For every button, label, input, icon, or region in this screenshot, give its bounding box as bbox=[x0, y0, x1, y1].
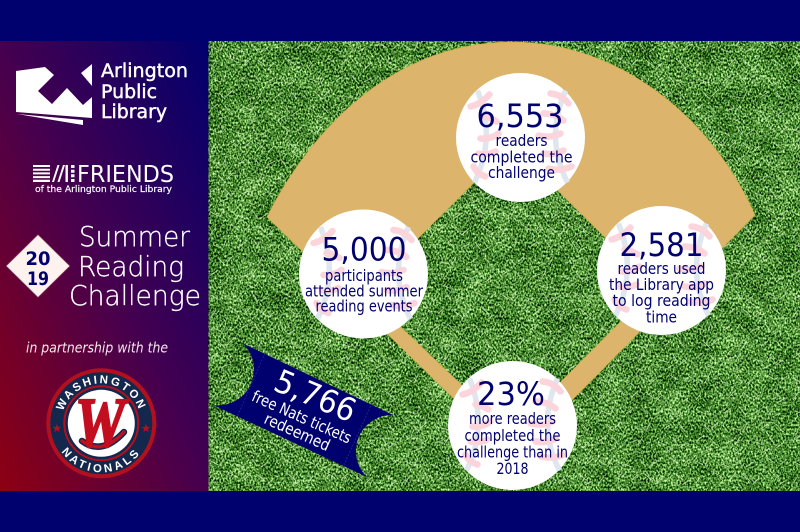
stat number: 2,581 bbox=[620, 226, 704, 264]
Friends of the Arlington Public Library logo bbox=[33, 162, 174, 195]
stat caption: 2018 bbox=[496, 459, 528, 478]
curly W swoosh fill bbox=[82, 432, 124, 447]
baseball circle bbox=[448, 361, 577, 490]
stat caption: completed the bbox=[464, 426, 560, 445]
baseball seams bbox=[462, 378, 564, 470]
stat caption: completed the bbox=[470, 148, 572, 166]
logo wordmark: Arlington bbox=[101, 61, 188, 82]
bottom navy band bbox=[0, 491, 800, 532]
Washington Nationals roundel bbox=[46, 368, 156, 478]
roundel rings bbox=[46, 368, 156, 478]
stat caption: more readers bbox=[469, 409, 556, 428]
grass field background bbox=[208, 41, 800, 491]
curly W letter: W bbox=[75, 385, 129, 462]
roundel bottom lettering: NATIONALS bbox=[62, 447, 138, 472]
friends icon: book stacks bbox=[33, 165, 74, 182]
stat caption: the Library app bbox=[609, 275, 714, 294]
baseball circle bbox=[456, 73, 585, 202]
challenge title: Summer bbox=[79, 220, 190, 253]
stat caption: readers used bbox=[618, 259, 706, 278]
baseball stat: 5,000 participants bbox=[299, 210, 428, 338]
baseball stat: 2,581 readers bbox=[597, 206, 726, 335]
ticket callout: free Nats tickets bbox=[213, 344, 393, 477]
baseball seams bbox=[314, 227, 414, 319]
stat caption: participants bbox=[325, 266, 403, 285]
friends subtitle: of the Arlington Public Library bbox=[35, 185, 172, 195]
badge year: 19 bbox=[27, 268, 49, 290]
baseball stat: 23% more readers bbox=[448, 361, 577, 490]
logo wordmark: Public bbox=[101, 82, 157, 103]
Arlington Public Library logo bbox=[16, 61, 188, 125]
ticket shape bbox=[213, 344, 393, 477]
ticket caption line 1: free Nats tickets bbox=[249, 387, 354, 447]
baseball seams bbox=[612, 224, 712, 316]
friends wordmark: FRIENDS bbox=[77, 162, 174, 188]
baseball stat: 6,553 readers bbox=[456, 73, 585, 202]
stat caption: time bbox=[646, 308, 677, 326]
logo icon: crown mark bbox=[16, 64, 92, 125]
ticket caption line 2: redeemed bbox=[261, 409, 333, 455]
stat number: 5,000 bbox=[322, 230, 406, 268]
top navy band bbox=[0, 0, 800, 41]
baseball seams bbox=[470, 90, 572, 182]
baseball circle bbox=[597, 206, 726, 335]
ticket perforations bbox=[237, 353, 372, 467]
challenge title: Challenge bbox=[69, 279, 201, 312]
stat number: 6,553 bbox=[476, 97, 564, 135]
infield dirt diamond bbox=[267, 42, 755, 458]
stat caption: challenge bbox=[488, 163, 555, 182]
challenge title: Reading bbox=[78, 250, 184, 283]
diamond shape bbox=[6, 234, 70, 298]
stat caption: attended summer bbox=[305, 282, 423, 300]
stat caption: to log reading bbox=[612, 291, 710, 310]
stat caption: reading events bbox=[316, 296, 412, 316]
grass blades texture bbox=[208, 41, 800, 491]
curly W swoosh bbox=[82, 432, 124, 447]
roundel stars bbox=[53, 424, 150, 432]
stat caption: readers bbox=[496, 131, 548, 150]
logo wordmark: Library bbox=[101, 102, 167, 123]
roundel top lettering: WASHINGTON bbox=[56, 375, 146, 410]
ticket number: 5,766 bbox=[269, 362, 362, 430]
sidebar gradient background bbox=[0, 41, 208, 491]
baseball circle bbox=[299, 210, 428, 338]
left sidebar panel bbox=[0, 41, 208, 491]
partnership line: in partnership with the bbox=[26, 340, 168, 356]
stat caption: challenge than in bbox=[457, 442, 568, 462]
2019 diamond badge bbox=[6, 234, 70, 298]
badge year: 20 bbox=[26, 248, 50, 270]
stat number: 23% bbox=[477, 375, 545, 413]
